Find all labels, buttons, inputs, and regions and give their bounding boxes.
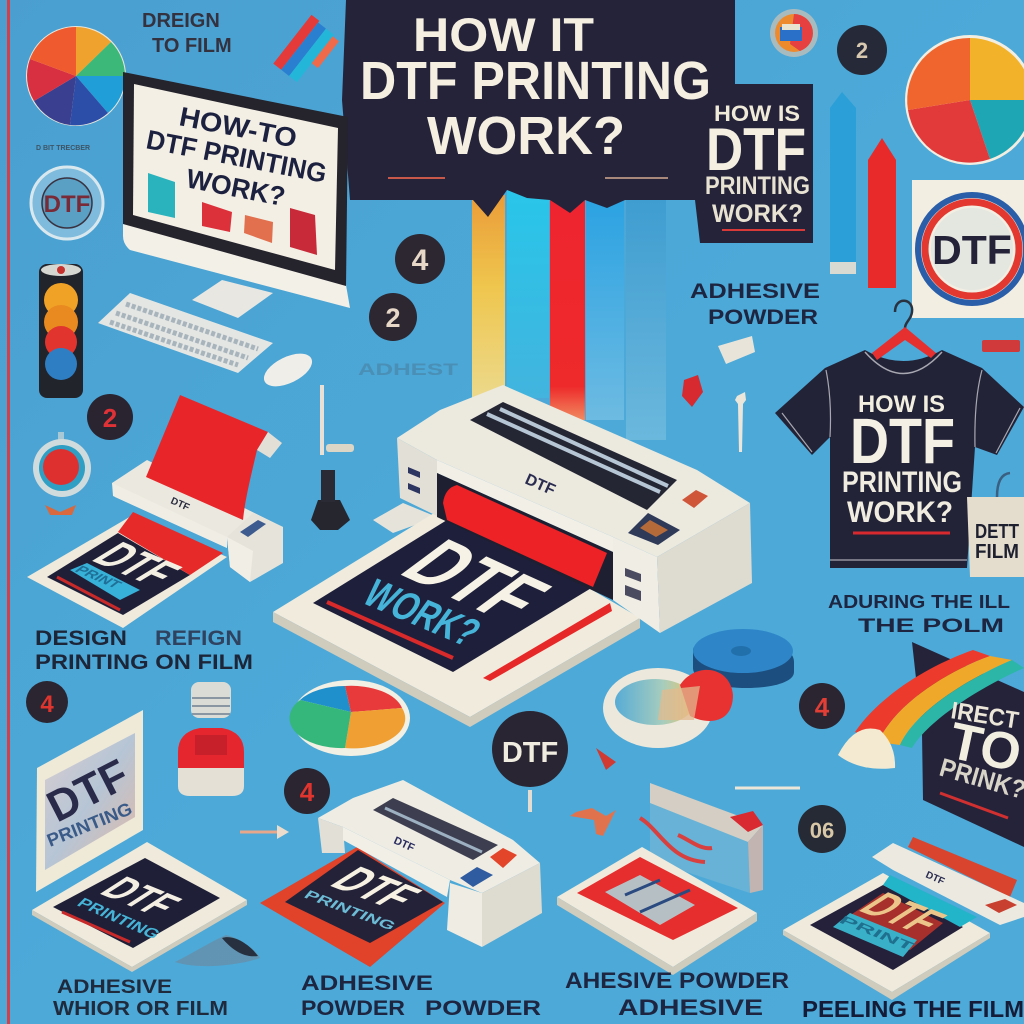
mouse bbox=[259, 347, 317, 393]
bottom caption: adhesive or film: WHIOR OR FILM bbox=[53, 998, 228, 1020]
standing film card: PRINTING bbox=[44, 798, 135, 851]
film tag bbox=[967, 473, 1024, 577]
small red label bbox=[982, 340, 1020, 352]
DTF text: DTF bbox=[318, 860, 434, 916]
secondary title panel: DTF bbox=[706, 116, 806, 183]
label: peeling the film top: THE POLM bbox=[858, 616, 1004, 637]
small logo: DTF bbox=[392, 835, 416, 855]
film sheet with print: DTF bbox=[89, 870, 192, 923]
number badge 4 right: 4 bbox=[815, 692, 830, 722]
DTF logo card bbox=[912, 180, 1024, 318]
number badge red 2 bbox=[87, 394, 133, 440]
title banner: HOW IT bbox=[413, 8, 594, 61]
small printer step 2 bbox=[27, 395, 283, 628]
bottom caption: peeling the film: PEELING THE FILM bbox=[802, 996, 1024, 1022]
printer bar red bbox=[908, 837, 1017, 897]
cyan print text: WORK? bbox=[355, 570, 490, 655]
lifted glass panel bbox=[640, 783, 763, 893]
printer right block bbox=[227, 513, 283, 582]
bottom caption: adhesive powder adhesive: ADHESIVE bbox=[618, 995, 763, 1020]
heat press ring bbox=[603, 668, 733, 748]
monitor chin bbox=[123, 222, 350, 308]
monitor screen text: HOW-TO bbox=[177, 101, 299, 154]
label: adhesive powder bbox=[690, 280, 820, 329]
colour streams bbox=[472, 188, 666, 440]
badge: DTF circle bbox=[31, 167, 103, 239]
black print area bbox=[47, 533, 190, 615]
label: design printing on film: REFIGN bbox=[155, 627, 242, 650]
right block bbox=[613, 537, 660, 633]
number badge 4: 4 bbox=[412, 244, 429, 277]
printer bar bbox=[872, 843, 1024, 925]
left red edge line bbox=[7, 0, 10, 1024]
printer body top bbox=[318, 780, 540, 893]
blue panel bbox=[460, 867, 493, 887]
monitor screen bbox=[133, 84, 338, 270]
badge: 2 top bbox=[837, 25, 887, 75]
number badge 06: 06 bbox=[810, 818, 834, 843]
cyan print band bbox=[70, 563, 140, 600]
red sheet bbox=[260, 847, 445, 967]
direct to print poster: TO bbox=[945, 712, 1024, 784]
monitor screen text: DTF PRINTING bbox=[144, 124, 329, 189]
t-shirt: DTF bbox=[850, 405, 955, 477]
secondary title panel: HOW IS bbox=[714, 101, 800, 126]
hanger bbox=[895, 301, 912, 328]
keyboard bbox=[98, 293, 273, 373]
number badge 4 centre bbox=[284, 768, 330, 814]
ink tubes bbox=[830, 92, 896, 288]
number badge red 2: 2 bbox=[103, 403, 117, 433]
label: design printing on film: PRINTING ON FILM bbox=[35, 651, 253, 674]
front strip bbox=[343, 827, 450, 897]
black print bbox=[285, 850, 443, 943]
ink cartridge tower bbox=[39, 264, 83, 398]
film sheet bbox=[27, 515, 227, 628]
bottom caption: adhesive powder adhesive bbox=[565, 968, 789, 1020]
thumbnails on screen bbox=[148, 173, 317, 255]
bottom caption: adhesive or film bbox=[53, 977, 228, 1020]
title banner: WORK? bbox=[427, 106, 625, 166]
label: peeling the film top: ADURING THE ILL bbox=[828, 591, 1010, 612]
dial icon bbox=[33, 432, 91, 515]
shirt body bbox=[775, 350, 1024, 568]
teal film bbox=[883, 875, 977, 927]
red button bbox=[490, 848, 517, 868]
printer front face bbox=[437, 460, 613, 552]
collar stitch bbox=[865, 352, 942, 374]
printer body bbox=[112, 460, 283, 551]
colour plate bbox=[290, 680, 410, 756]
printer peeling film: DTF bbox=[924, 870, 946, 888]
printer logo: DTF bbox=[522, 471, 558, 499]
left front bbox=[318, 818, 345, 853]
title banner: DTF PRINTING bbox=[360, 51, 711, 111]
bottom caption: adhesive powder: POWDER bbox=[301, 997, 405, 1020]
small round icon bbox=[770, 9, 818, 57]
DTF: DTF bbox=[847, 886, 957, 941]
heading: design to film: DREIGN bbox=[142, 10, 220, 32]
red sheet roll bbox=[146, 395, 268, 520]
rainbow bbox=[855, 650, 990, 742]
number badge 2 bbox=[369, 293, 417, 341]
bottom caption: adhesive powder: ADHESIVE bbox=[301, 972, 433, 995]
label: design printing on film bbox=[35, 627, 253, 674]
colour swatch stripes bbox=[273, 15, 341, 87]
red roll bbox=[443, 485, 607, 587]
cyan text: PRINTING bbox=[301, 888, 399, 933]
bottom caption: adhesive powder bbox=[301, 972, 541, 1020]
logo mark bbox=[682, 490, 708, 508]
heading: design to film bbox=[142, 10, 232, 57]
badge: 2 top: 2 bbox=[856, 38, 868, 63]
badge: DTF oval: DTF bbox=[502, 737, 558, 769]
direct to print poster bbox=[838, 642, 1024, 847]
standing film card: DTF bbox=[39, 750, 136, 832]
secondary title panel bbox=[695, 84, 813, 243]
control panel bbox=[628, 513, 680, 545]
left ports bbox=[408, 467, 420, 494]
badge: DTF oval bbox=[492, 711, 568, 787]
red lower strip bbox=[483, 603, 612, 681]
number badge red 4 left: 4 bbox=[40, 691, 54, 718]
left block front bbox=[397, 438, 437, 516]
label: adhesive powder: ADHESIVE bbox=[690, 280, 820, 303]
film sheet with print: PRINTING bbox=[73, 895, 164, 942]
monitor bbox=[123, 72, 350, 318]
right block bbox=[447, 883, 482, 947]
small printer step 2: PRINT bbox=[71, 564, 125, 591]
arrow to printer bbox=[240, 825, 289, 839]
opening bbox=[437, 473, 613, 600]
secondary title panel: PRINTING bbox=[705, 172, 810, 200]
print title: DTF bbox=[80, 535, 194, 593]
t-shirt: PRINTING bbox=[842, 466, 962, 499]
printer base leg bbox=[373, 503, 437, 533]
number badge 4 right bbox=[799, 683, 845, 729]
printer step 4 bbox=[260, 780, 542, 967]
shirt text: HOW IS bbox=[858, 391, 945, 418]
number badge 4 centre: 4 bbox=[300, 777, 315, 807]
colour wheel top left bbox=[26, 26, 126, 126]
standing film card bbox=[36, 710, 143, 892]
printer logo: DTF bbox=[169, 496, 191, 514]
DTF logo card: DTF bbox=[932, 227, 1012, 273]
secondary title panel: WORK? bbox=[712, 200, 803, 228]
white line mark bbox=[735, 786, 800, 790]
faint label: ADHEST bbox=[358, 360, 459, 379]
slot with stripes bbox=[470, 402, 677, 510]
label: design printing on film: DESIGN bbox=[35, 627, 127, 650]
red feed sheet bbox=[118, 512, 223, 575]
film tag: FILM bbox=[975, 541, 1019, 563]
monitor screen text: WORK? bbox=[184, 163, 288, 212]
powder pile bbox=[838, 728, 895, 769]
small caption: D BIT TRECBER bbox=[36, 145, 90, 152]
powder bottle bbox=[178, 682, 244, 796]
slot bbox=[373, 798, 498, 860]
red print line bbox=[327, 602, 453, 658]
poster board bbox=[912, 642, 1024, 847]
black print bbox=[810, 885, 963, 970]
monitor bezel bbox=[123, 72, 348, 286]
monitor stand bbox=[192, 280, 273, 318]
small brush bbox=[175, 935, 260, 966]
t-shirt: WORK? bbox=[847, 496, 953, 529]
number badge 06 bbox=[798, 805, 846, 853]
monitor screen text bbox=[144, 101, 329, 212]
bottom caption: adhesive powder: POWDER bbox=[425, 997, 541, 1020]
poster text: IRECT bbox=[949, 697, 1021, 735]
bottom caption: adhesive powder adhesive: AHESIVE POWDER bbox=[565, 968, 789, 993]
colour wheel top right bbox=[905, 35, 1024, 165]
dark print on film bbox=[313, 520, 593, 672]
tape roll bbox=[693, 629, 794, 688]
film sheet / base bbox=[273, 505, 640, 717]
film sheet with print bbox=[32, 842, 247, 972]
scattered marks bbox=[528, 748, 616, 836]
title banner bbox=[342, 0, 735, 217]
number badge 2: 2 bbox=[385, 303, 401, 333]
bottom caption: adhesive or film: ADHESIVE bbox=[57, 977, 172, 998]
label: adhesive powder: POWDER bbox=[708, 306, 818, 329]
heading: design to film: TO FILM bbox=[152, 35, 232, 57]
droplets and pins bbox=[682, 336, 755, 452]
cyan text bbox=[833, 913, 917, 957]
printer peeling film bbox=[783, 837, 1024, 1000]
number badge red 4 left bbox=[26, 681, 68, 723]
adhesive powder sheet bbox=[557, 847, 757, 975]
label: peeling the film top bbox=[828, 591, 1010, 637]
number badge 4 bbox=[395, 234, 445, 284]
printer peeling film: PRINT bbox=[836, 913, 919, 953]
ink bottle small centre bbox=[311, 385, 354, 530]
sheet bbox=[783, 873, 990, 992]
main printer bbox=[273, 385, 752, 727]
badge: DTF circle: DTF bbox=[44, 191, 90, 218]
DTF print title: DTF bbox=[382, 526, 569, 634]
dark red panel bbox=[833, 893, 943, 950]
t-shirt bbox=[775, 301, 1024, 568]
printer body top bbox=[397, 385, 750, 557]
